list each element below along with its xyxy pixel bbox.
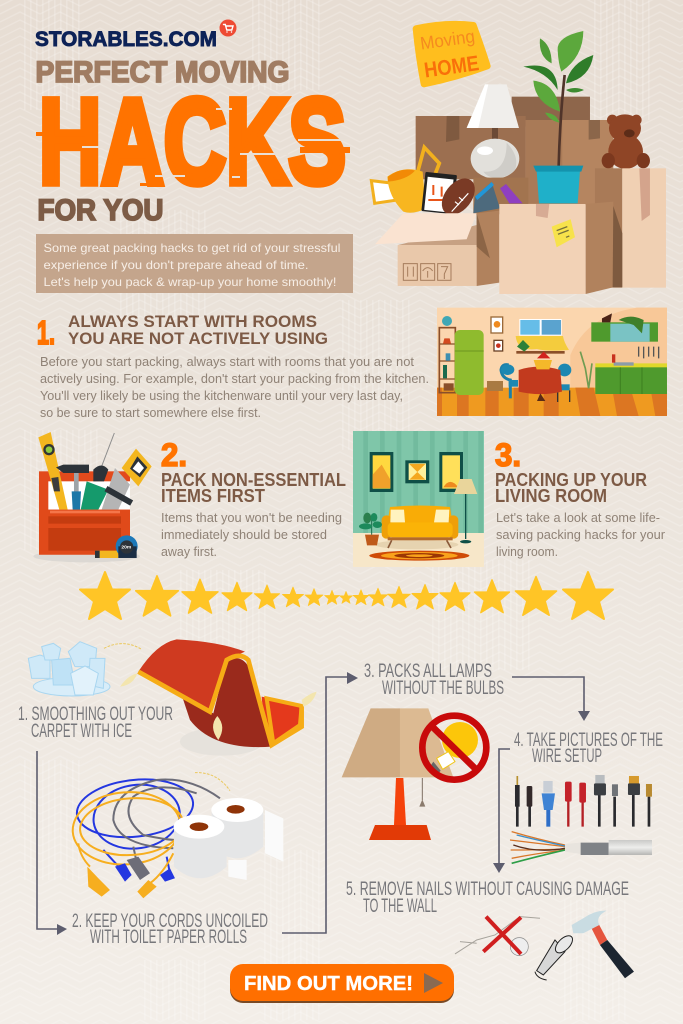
button: find out more	[230, 964, 454, 1003]
cable connectors	[515, 775, 652, 827]
step 1 label: 1. SMOOTHING OUT YOUR	[18, 704, 173, 725]
section 3 heading	[495, 470, 647, 506]
section 1 heading: YOU ARE NOT ACTIVELY USING	[68, 329, 328, 348]
section 3 heading: PACKING UP YOUR	[495, 470, 647, 490]
stripped network cable	[510, 832, 652, 863]
sticker: moving home: HOME	[423, 51, 480, 82]
illustration: ice cubes and carpet	[28, 639, 317, 756]
section 1 body text: You'll very likely be using the kitchenware until your very last day,	[40, 389, 403, 403]
illustration: toolbox	[33, 432, 152, 562]
section 2 body text: away first.	[161, 545, 217, 559]
no bulb sign	[422, 716, 486, 780]
carpet	[120, 639, 317, 756]
dashed arrow	[104, 644, 142, 649]
arrow: step 2 to step 3	[282, 672, 358, 933]
illustration: lamp with no-bulb sign	[342, 708, 486, 840]
illustration: living room	[353, 431, 484, 567]
ice cubes	[28, 642, 110, 696]
section 3 body text: saving packing hacks for your	[496, 528, 665, 542]
section 3 body text: living room.	[496, 545, 558, 559]
step 3 label: WITHOUT THE BULBS	[382, 678, 504, 699]
hammer	[572, 911, 634, 978]
gray cord	[113, 780, 220, 870]
step 1 label: CARPET WITH ICE	[31, 721, 132, 742]
section 1 body text: actively using. For example, don't start your packing from the kitchen.	[40, 372, 429, 386]
section 3 heading: LIVING ROOM	[495, 486, 607, 506]
illustration: cords and toilet paper	[70, 773, 283, 898]
illustration: nail removal	[455, 911, 634, 980]
section 2 heading	[161, 470, 346, 506]
step 4 label: WIRE SETUP	[532, 746, 602, 767]
section 2 body text: immediately should be stored	[161, 528, 327, 542]
brand logo: storables.com	[35, 20, 236, 51]
step 5 label	[346, 879, 629, 917]
dashed arrow	[195, 773, 230, 791]
row of stars	[80, 572, 613, 619]
blue cord	[74, 774, 196, 873]
title: hacks: HACKS	[39, 73, 346, 209]
sticker: moving home: Moving	[419, 26, 476, 54]
illustration: toolbox: 20m	[121, 545, 132, 551]
button: find out more: FIND OUT MORE!	[244, 973, 413, 995]
lamp	[342, 708, 453, 840]
brand logo: storables.com: STORABLES.COM	[35, 28, 217, 51]
section 3 number: 3.	[495, 437, 521, 473]
lamp	[467, 84, 519, 179]
section 1 number: 1.	[37, 314, 55, 351]
plant	[523, 31, 593, 167]
flower pot	[533, 166, 583, 203]
step 1 label	[18, 704, 173, 742]
inner box contents	[421, 172, 528, 221]
intro text panel: experience if you don't prepare ahead of time.	[44, 258, 308, 272]
back boxes	[416, 97, 613, 205]
sticker: moving home	[416, 24, 487, 84]
yellow cord	[70, 789, 185, 883]
illustration: cables	[510, 775, 652, 863]
nail	[535, 933, 576, 980]
toilet paper rolls	[174, 798, 283, 880]
step 5 label: TO THE WALL	[363, 896, 437, 917]
cord plugs	[87, 857, 175, 898]
step 2 label	[72, 911, 268, 948]
intro text panel: Some great packing hacks to get rid of your stressful	[44, 241, 340, 255]
wall crack with cross	[455, 917, 540, 956]
step 4 label	[514, 730, 663, 767]
section 1 heading: ALWAYS START WITH ROOMS	[68, 312, 317, 331]
trophy	[371, 147, 439, 213]
section 1 body text	[40, 355, 429, 420]
arrow: step 4 to step 5	[493, 749, 510, 873]
section 1 body text: so be sure to start somewhere else first.	[40, 406, 261, 420]
section 3 body text: Let's take a look at some life-	[496, 511, 660, 525]
teddy bear	[602, 114, 650, 169]
illustration: kitchen	[437, 308, 667, 416]
section 2 heading: ITEMS FIRST	[161, 486, 265, 506]
arrow: step 3 to step 4	[512, 677, 590, 721]
illustration: moving boxes	[371, 24, 666, 294]
title line: for you: FOR YOU	[38, 194, 164, 227]
section 2 body text: Items that you won't be needing	[161, 511, 342, 525]
intro text panel	[36, 234, 353, 293]
right box	[595, 168, 666, 288]
step 2 label: WITH TOILET PAPER ROLLS	[90, 927, 247, 948]
step 3 label: 3. PACKS ALL LAMPS	[364, 661, 492, 682]
section 2 heading: PACK NON-ESSENTIAL	[161, 470, 346, 490]
section 2 body text	[161, 511, 342, 559]
step 2 label: 2. KEEP YOUR CORDS UNCOILED	[72, 911, 268, 932]
section 1 heading	[68, 312, 328, 348]
open box	[375, 211, 499, 286]
section 2 number: 2.	[161, 437, 187, 473]
step 3 label	[364, 661, 504, 699]
section 3 body text	[496, 511, 665, 559]
arrow: step 1 to step 2	[37, 751, 67, 935]
front box	[499, 202, 622, 294]
section 1 body text: Before you start packing, always start with rooms that you are not	[40, 355, 415, 369]
intro text panel: Let's help you pack & wrap-up your home smoothly!	[44, 275, 336, 289]
title line: perfect moving: PERFECT MOVING	[36, 56, 290, 89]
